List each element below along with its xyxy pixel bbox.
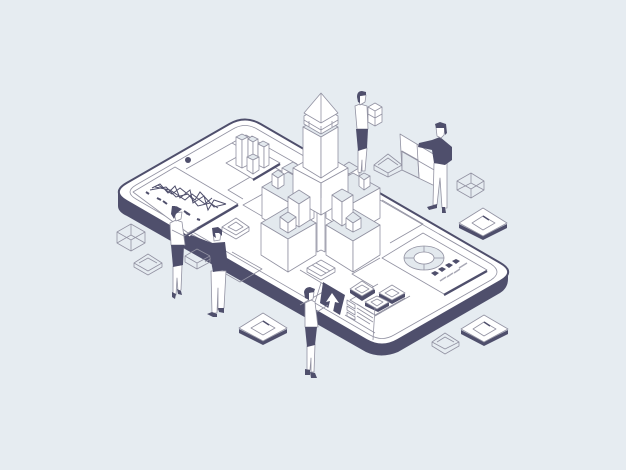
panel: donut chart — [382, 233, 487, 295]
back pillars — [282, 162, 303, 174]
text lines panel — [347, 300, 373, 324]
panel: line chart — [133, 167, 238, 235]
pyramid — [304, 93, 338, 123]
tiles on phone — [222, 218, 405, 312]
center strip — [317, 212, 325, 252]
buildings — [261, 93, 380, 272]
front pillars — [288, 190, 310, 204]
person: woman left — [170, 206, 197, 299]
small cubes — [272, 170, 284, 178]
person: man right — [400, 122, 452, 213]
right mid block — [326, 173, 380, 203]
person: woman top — [355, 91, 382, 173]
ground boxes — [374, 154, 402, 177]
ground tiles — [459, 208, 507, 240]
center block — [293, 152, 348, 183]
person: man front-left — [187, 227, 228, 317]
left mid block — [262, 172, 314, 202]
panel: arrow — [320, 282, 375, 340]
tower — [303, 117, 338, 137]
panel: bar platform — [226, 134, 280, 180]
small front cubes — [280, 212, 296, 223]
right big cube — [326, 209, 380, 241]
tower band — [304, 106, 338, 134]
left big cube — [261, 207, 316, 239]
open box — [307, 260, 335, 280]
person: woman bottom — [304, 283, 328, 378]
phone — [118, 120, 508, 356]
